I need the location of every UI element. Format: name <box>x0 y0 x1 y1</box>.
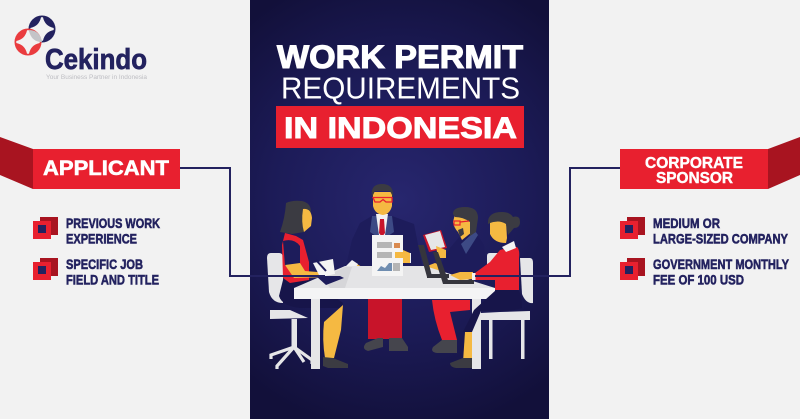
connector: right <box>475 168 620 276</box>
text: medium or large-sized company: MEDIUM OR <box>653 215 720 231</box>
icon: bullet 4 <box>620 258 645 280</box>
left chair <box>267 253 312 369</box>
title line: work permit: WORK PERMIT <box>277 39 523 75</box>
title <box>276 39 524 148</box>
laptops <box>418 245 474 284</box>
panel: applicant <box>0 137 180 288</box>
text: previous work experience: PREVIOUS WORK <box>66 215 160 231</box>
icon: bullet 2 <box>33 258 58 280</box>
text: previous work experience <box>66 215 160 246</box>
icon: bullet 3 <box>620 217 645 239</box>
text: specific job field and title: SPECIFIC JOB <box>66 256 143 272</box>
icon: bullet 1 <box>33 217 58 239</box>
person: man in centre <box>345 184 423 351</box>
title banner: in indonesia <box>276 106 524 148</box>
ribbon: corporate sponsor: SPONSOR <box>656 170 733 187</box>
ribbon: corporate sponsor <box>620 137 800 189</box>
ribbon: applicant <box>0 137 180 189</box>
person: man right <box>423 207 487 353</box>
panel: corporate sponsor <box>620 137 800 288</box>
title line: requirements: REQUIREMENTS <box>281 70 520 106</box>
person: woman left <box>279 201 348 368</box>
notebook and pen <box>313 259 344 285</box>
logo wordmark: Cekindo <box>45 44 147 76</box>
person: woman right <box>450 212 522 368</box>
document with charts <box>372 235 410 276</box>
text: medium or large-sized company <box>653 215 789 246</box>
text: specific job field and title <box>66 256 159 288</box>
right chair <box>481 253 533 359</box>
panel: central dark background <box>250 0 549 419</box>
text: specific job field and title: FIELD AND TITLE <box>66 272 159 288</box>
ribbon: applicant: APPLICANT <box>43 157 169 180</box>
logo: Cekindo <box>14 16 147 81</box>
logo tagline: Your Business Partner in Indonesia <box>46 74 147 81</box>
connector: left <box>180 168 325 276</box>
icon: logo rings <box>14 16 56 56</box>
text: previous work experience: EXPERIENCE <box>66 230 137 246</box>
table <box>294 266 495 369</box>
text: government monthly fee: FEE OF 100 USD <box>653 272 744 288</box>
text: government monthly fee <box>653 256 790 288</box>
illustration: office meeting <box>180 168 620 369</box>
title banner: in indonesia: IN INDONESIA <box>284 112 517 145</box>
ribbon: corporate sponsor: CORPORATE <box>645 155 743 172</box>
